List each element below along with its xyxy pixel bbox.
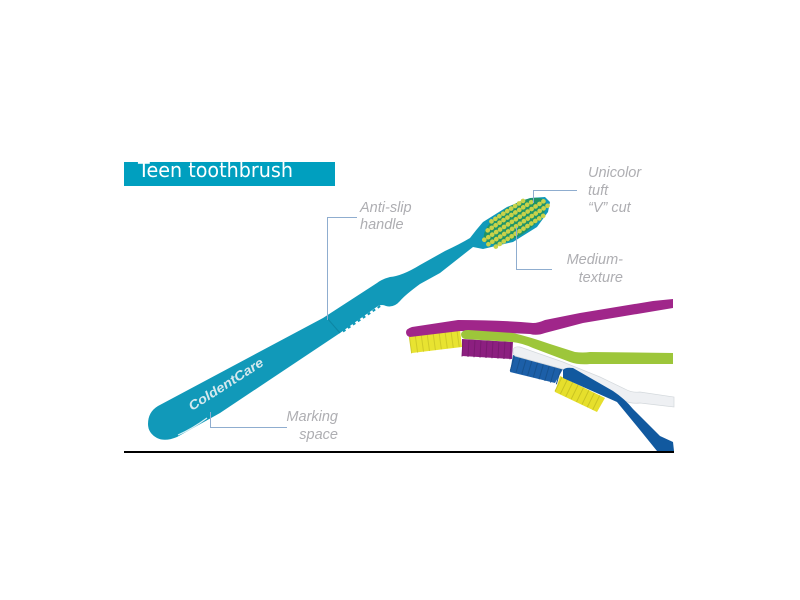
main teal toothbrush bbox=[148, 189, 553, 440]
leader: unicolor tuft bbox=[534, 190, 577, 203]
green toothbrush bbox=[461, 330, 673, 364]
label: unicolor tuft V cut: Unicolor bbox=[588, 165, 642, 181]
label: anti-slip handle: handle bbox=[360, 217, 404, 233]
title banner bbox=[124, 162, 335, 186]
white toothbrush bbox=[510, 347, 674, 407]
leader: marking space bbox=[210, 412, 287, 428]
bristle head bbox=[477, 189, 553, 253]
baseline bbox=[124, 451, 674, 453]
logo: ColdentCare bbox=[186, 355, 266, 414]
purple toothbrush bbox=[406, 299, 673, 353]
leader: medium texture bbox=[516, 227, 552, 270]
label: anti-slip handle: Anti-slip bbox=[359, 200, 412, 216]
label: medium-texture: texture bbox=[579, 270, 623, 286]
label: marking space: space bbox=[299, 427, 338, 443]
anti-slip ridges bbox=[330, 284, 381, 332]
blue toothbrush bbox=[555, 368, 674, 451]
leader: anti-slip handle bbox=[328, 218, 357, 320]
grip seam bbox=[327, 318, 340, 333]
label: unicolor tuft V cut: “V” cut bbox=[588, 200, 632, 216]
label: unicolor tuft V cut bbox=[588, 165, 642, 216]
label: unicolor tuft V cut: tuft bbox=[588, 183, 609, 199]
label: marking space: Marking bbox=[286, 409, 338, 425]
label: medium-texture bbox=[567, 252, 623, 286]
label: medium-texture: Medium- bbox=[567, 252, 623, 268]
label: marking space bbox=[286, 409, 338, 443]
title banner: Teen toothbrush bbox=[137, 158, 293, 182]
label: anti-slip handle bbox=[359, 200, 412, 233]
handle highlight bbox=[178, 418, 207, 435]
